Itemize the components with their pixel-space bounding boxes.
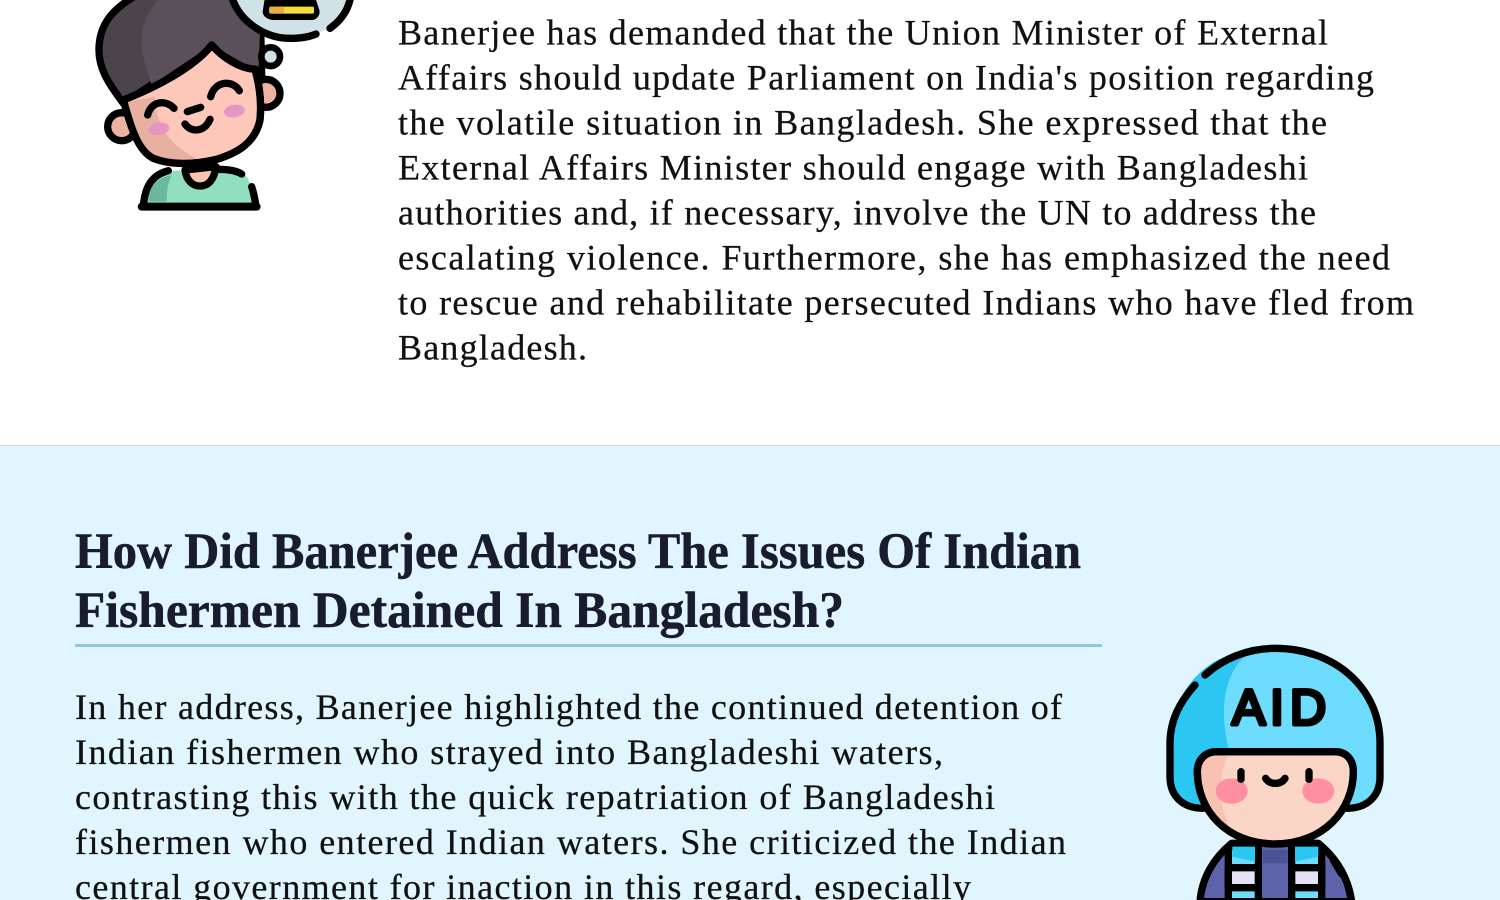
icon: smiling child with thought bubble [95, 0, 354, 211]
text block: Banerjee's demand: Affairs should update Parliament on India's position regarding [398, 58, 1374, 98]
text block: detained fishermen: contrasting this with the quick repatriation of Bangladeshi [75, 777, 995, 817]
text block: Banerjee's demand: escalating violence. Furthermore, she has emphasized the need [398, 238, 1390, 278]
text block: detained fishermen: In her address, Banerjee highlighted the continued detention of [75, 687, 1062, 727]
text block: detained fishermen: Indian fishermen who strayed into Bangladeshi waters, [75, 732, 943, 772]
text block: Banerjee's demand: Banerjee has demanded that the Union Minister of External [398, 12, 1328, 52]
icon: aid worker in helmet [1166, 644, 1384, 900]
text block: Banerjee's demand: Bangladesh. [398, 328, 587, 368]
heading underline [75, 644, 1102, 647]
text block: Banerjee's demand: the volatile situation in Bangladesh. She expressed that the [398, 102, 1327, 142]
heading: fishermen question: Fishermen Detained In Bangladesh? [75, 583, 844, 639]
icon text: AID: AID [1232, 680, 1326, 736]
text block: detained fishermen [75, 687, 1066, 900]
panel: light blue section background [0, 445, 1500, 900]
text block: Banerjee's demand: External Affairs Minister should engage with Bangladeshi [398, 148, 1308, 188]
text block: Banerjee's demand: authorities and, if necessary, involve the UN to address the [398, 192, 1316, 232]
text block: Banerjee's demand: to rescue and rehabilitate persecuted Indians who have fled from [398, 282, 1414, 322]
text block: Banerjee's demand [398, 12, 1414, 368]
text block: detained fishermen: fishermen who entered Indian waters. She criticized the Indian [75, 822, 1066, 862]
heading: fishermen question [75, 524, 1081, 639]
heading: fishermen question: How Did Banerjee Address The Issues Of Indian [75, 524, 1081, 580]
